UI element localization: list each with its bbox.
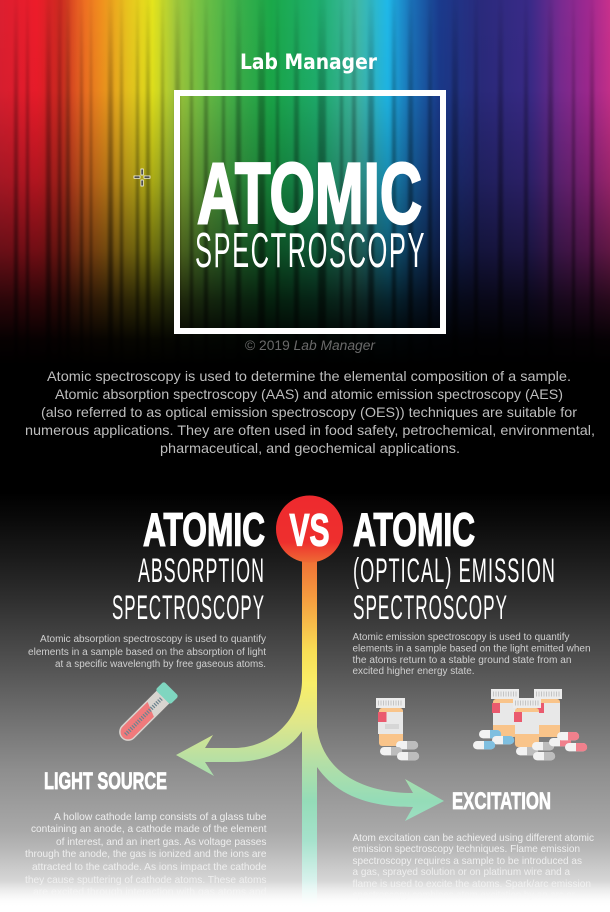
- trunk: [302, 556, 317, 912]
- title: [195, 146, 426, 278]
- excitation description: a gas, sprayed solution or on platinum wire and a: [352, 867, 570, 878]
- light source description: A hollow cathode lamp consists of a glass tube: [54, 812, 267, 823]
- light source description: attracted to the cathode. As ions impact the cathode: [32, 862, 267, 873]
- heading: atomic emission spectroscopy: ATOMIC: [353, 504, 475, 556]
- infographic: SPECTROSCOPY: [112, 589, 265, 627]
- icon: single medicine bottle and pills: [376, 698, 419, 760]
- intro text: Atomic absorption spectroscopy (AAS) and atomic emission spectroscopy (AES): [55, 386, 563, 402]
- title frame: [177, 93, 443, 331]
- intro text: [25, 368, 595, 456]
- intro text: numerous applications. They are often used in food safety, petrochemical, environmental,: [25, 422, 595, 438]
- light source description: containing an anode, a cathode made of the element: [31, 824, 267, 835]
- intro text: pharmaceutical, and geochemical applications.: [160, 440, 460, 456]
- excitation description: [352, 833, 594, 901]
- copyright: © 2019 Lab Manager: [245, 338, 376, 353]
- heading: excitation: EXCITATION: [452, 788, 551, 815]
- spectrum banner: [0, 0, 610, 365]
- light source description: through the anode, the gas is ionized and the ions are: [25, 849, 267, 860]
- title: ATOMIC: [197, 146, 422, 242]
- flow trunk and arrows: [176, 556, 444, 912]
- excitation description: spectroscopy requires a sample to be introduced as: [352, 856, 582, 867]
- excitation description: Atom excitation can be achieved using different atomic: [352, 833, 594, 844]
- absorption description: at a specific wavelength by free gaseous atoms.: [55, 659, 266, 670]
- heading: atomic absorption spectroscopy: ATOMIC: [143, 504, 265, 556]
- heading: atomic emission spectroscopy: [353, 504, 556, 627]
- absorption description: elements in a sample based on the absorption of light: [28, 647, 266, 658]
- vs badge: VS: [290, 504, 330, 556]
- emission description: the atoms return to a stable ground state from an: [352, 655, 572, 666]
- absorption description: Atomic absorption spectroscopy is used to quantify: [40, 634, 266, 645]
- absorption description: [28, 634, 266, 670]
- heading: light source: LIGHT SOURCE: [44, 768, 167, 795]
- excitation description: flame is used to excite the atoms. Spark/arc emission: [352, 879, 591, 890]
- excitation description: spectroscopy combines atom excitation by an arc or: [352, 890, 576, 901]
- arrow: right to excitation: [317, 727, 444, 821]
- intro text: Atomic spectroscopy is used to determine the elemental composition of a sample.: [47, 368, 571, 384]
- arrow: left to light source: [176, 680, 310, 776]
- intro text: (also referred to as optical emission spectroscopy (OES)) techniques are suitable for: [41, 404, 577, 420]
- heading: atomic absorption spectroscopy: [112, 504, 265, 627]
- emission description: elements in a sample based on the light emitted when: [352, 644, 590, 654]
- icon: three medicine bottles and pills: [473, 689, 587, 760]
- excitation description: emission spectroscopy techniques. Flame emission: [352, 844, 580, 855]
- icon: test tube: [114, 681, 179, 746]
- light source description: [25, 812, 267, 898]
- vs badge: [276, 496, 343, 562]
- light source description: are excited through interaction with gas atoms and: [33, 887, 267, 898]
- emission description: excited higher energy state.: [352, 666, 474, 677]
- light source description: they cause sputtering of cathode atoms. These atoms: [25, 875, 266, 886]
- emission description: Atomic emission spectroscopy is used to quantify: [352, 632, 570, 643]
- light source description: of interest, and an inert gas. As voltage passes: [56, 837, 266, 848]
- bottom white fade: [0, 880, 610, 912]
- emission description: [352, 632, 590, 677]
- logo: Lab Manager: Lab Manager: [240, 50, 378, 74]
- icon: crosshair cursor: [134, 169, 150, 186]
- heading: atomic absorption spectroscopy: ABSORPTION: [138, 552, 265, 590]
